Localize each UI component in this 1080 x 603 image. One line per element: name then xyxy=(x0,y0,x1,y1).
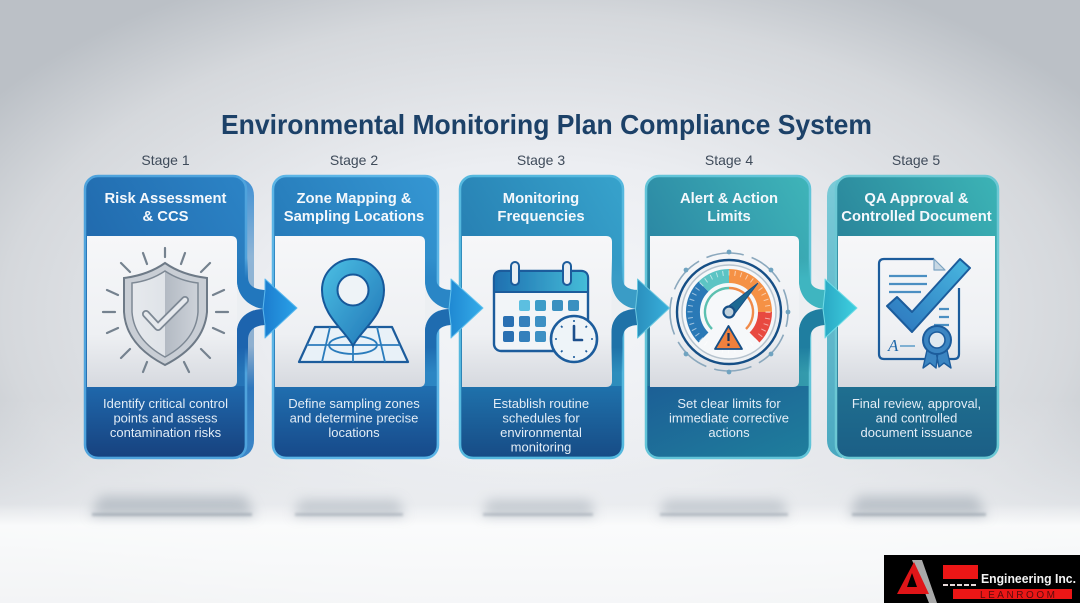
stage 5 footer xyxy=(838,386,996,456)
icon: calendar and clock xyxy=(494,262,597,362)
stage 1 heading: Risk Assessment xyxy=(104,191,227,207)
stage 3 heading: Frequencies xyxy=(497,209,585,225)
signature: A xyxy=(887,336,899,355)
stage 4 heading: Limits xyxy=(707,209,751,225)
stage 1 heading: & CCS xyxy=(142,209,189,225)
arrow: stage 1 to 2 xyxy=(237,258,297,373)
stage 2 image panel xyxy=(275,236,425,387)
stage 4 card body xyxy=(646,176,810,458)
icon: approved document xyxy=(879,259,970,368)
logo xyxy=(884,555,1080,603)
stage 3 description: Establish routine xyxy=(493,396,589,411)
stage 5 heading: Controlled Document xyxy=(841,209,992,225)
arrow: stage 2 to 3 xyxy=(425,258,483,373)
panel: stage 1 xyxy=(85,152,254,458)
panel: stage 4 xyxy=(646,152,810,458)
arrow: stage 3 to 4 xyxy=(612,258,670,373)
stage 3 heading: Monitoring xyxy=(503,191,579,207)
stage 3 label: Stage 3 xyxy=(517,152,565,168)
stage 2 description: Define sampling zones xyxy=(288,396,420,411)
stage 5 heading: QA Approval & xyxy=(864,191,969,207)
stage 1 description: Identify critical control xyxy=(103,396,228,411)
panel: stage 3 xyxy=(460,152,623,458)
stage 3 description: monitoring xyxy=(511,440,571,454)
logo name: Engineering Inc. xyxy=(981,572,1076,586)
stage 2 card body xyxy=(273,176,438,458)
title: Environmental Monitoring Plan Compliance System xyxy=(221,109,872,140)
stage 4 description: actions xyxy=(708,425,750,440)
stage 1 description: contamination risks xyxy=(110,425,222,440)
stage 4 description: immediate corrective xyxy=(669,410,789,426)
stage 5 card body xyxy=(836,176,998,458)
stage 3 description: environmental xyxy=(500,425,582,440)
panel: stage 2 xyxy=(273,152,438,458)
stage 1 label: Stage 1 xyxy=(141,152,190,168)
icon: gauge with warning xyxy=(670,250,790,374)
stage 4 image panel xyxy=(650,236,799,387)
stage 3 description: schedules for xyxy=(502,410,580,426)
stage 5 description: Final review, approval, xyxy=(852,396,981,411)
stage 2 footer xyxy=(274,386,436,456)
stage 3 footer xyxy=(462,386,622,456)
arrow: stage 4 to 5 xyxy=(799,258,857,373)
stage 5 label: Stage 5 xyxy=(892,152,940,168)
stage 5 description: and controlled xyxy=(876,410,957,426)
stage 2 heading: Zone Mapping & xyxy=(296,191,412,207)
stage 2 heading: Sampling Locations xyxy=(284,209,424,225)
logo subtitle: LEANROOM xyxy=(980,590,1055,601)
stage 5 image panel xyxy=(838,236,995,387)
stage 1 card side xyxy=(240,178,254,458)
stage 4 heading: Alert & Action xyxy=(680,191,778,207)
floor shadows xyxy=(90,496,988,516)
stage 3 image panel xyxy=(462,236,612,387)
stage 3 card body xyxy=(460,176,623,458)
stage 2 description: and determine precise xyxy=(290,410,418,426)
icon: shield with check xyxy=(103,248,228,372)
stage 4 footer xyxy=(648,386,808,456)
stage 1 image panel xyxy=(87,236,237,387)
panel: stage 5 xyxy=(827,152,998,458)
icon: map pin on grid xyxy=(299,259,408,362)
stage 4 description: Set clear limits for xyxy=(677,396,781,411)
stage 2 label: Stage 2 xyxy=(330,152,378,168)
stage 1 description: points and assess xyxy=(113,410,218,426)
stage 2 description: locations xyxy=(328,425,380,440)
stage 5 description: document issuance xyxy=(860,425,973,440)
stage 5 card side xyxy=(827,178,842,458)
stage 1 card body xyxy=(85,176,246,458)
stage 4 label: Stage 4 xyxy=(705,152,753,168)
stage 1 footer xyxy=(86,386,244,456)
